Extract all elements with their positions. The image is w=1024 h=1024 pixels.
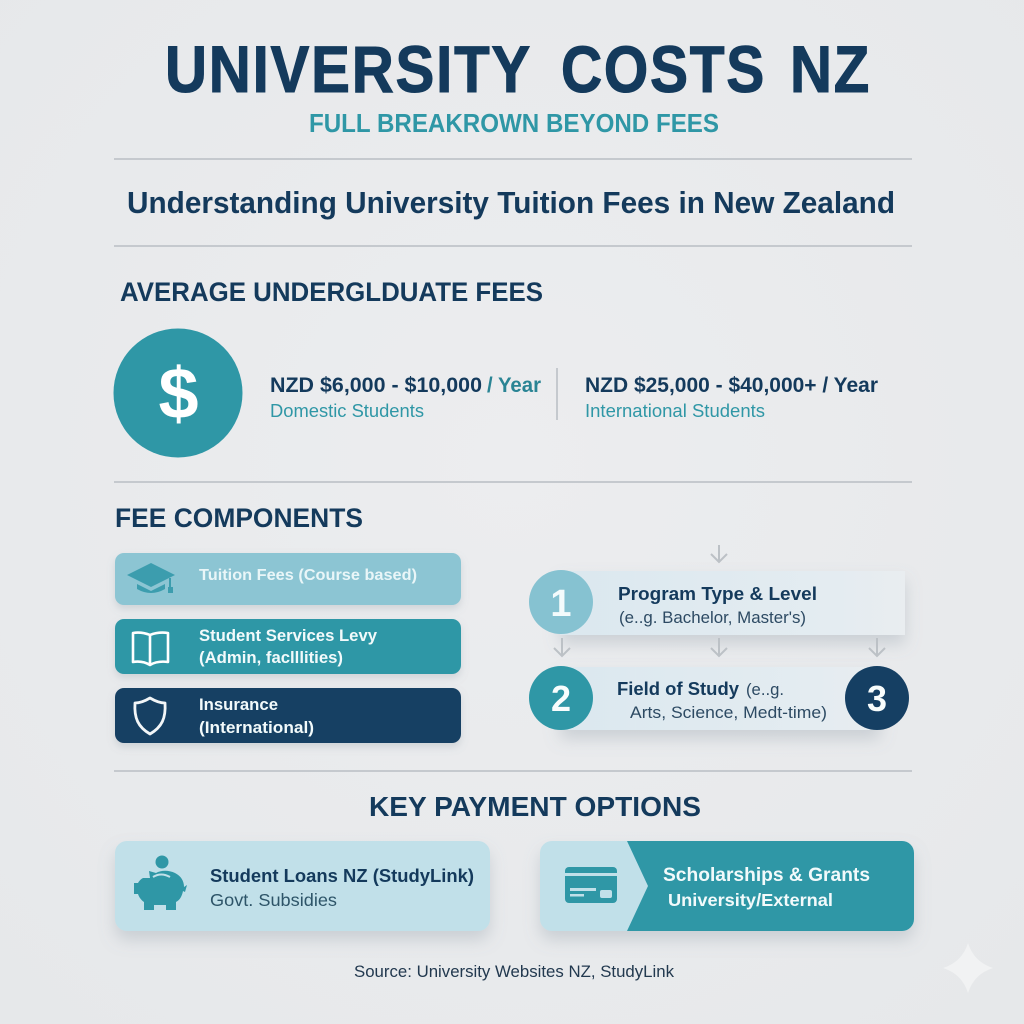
step 2 badge [529, 666, 593, 730]
panel: program type [560, 571, 905, 635]
card: student loans: Govt. Subsidies [210, 890, 337, 910]
panel: field of study [560, 667, 880, 730]
card: scholarships and grants: University/External [668, 890, 833, 910]
icon: sparkle watermark [943, 943, 993, 993]
panel: insurance: (International) [199, 719, 314, 737]
panel: insurance: Insurance [199, 696, 278, 714]
panel: tuition fees [115, 553, 461, 605]
heading: average undergraduate fees: AVERAGE UNDERGLDUATE FEES [120, 277, 543, 307]
subtitle: FULL BREAKROWN BEYOND FEES [309, 108, 719, 138]
domestic fee text: NZD $6,000 - $10,000 [270, 374, 482, 397]
icon: dollar coin [114, 328, 242, 458]
step 3 badge [845, 666, 909, 730]
title: UNIVERSITY [165, 32, 532, 106]
panel: field of study: Field of Study [617, 678, 740, 699]
domestic fee text: Domestic Students [270, 401, 424, 421]
arrow: top [711, 545, 727, 562]
heading: key payment options: KEY PAYMENT OPTIONS [369, 791, 701, 822]
panel: field of study: Arts, Science, Medt-time) [630, 704, 827, 722]
title [165, 32, 871, 106]
panel: tuition fees: Tuition Fees (Course based) [199, 567, 417, 584]
card: scholarships and grants: Scholarships & Grants [663, 864, 870, 886]
icon: open book [133, 633, 168, 665]
card: student loans [115, 841, 490, 931]
icon: shield [135, 698, 165, 734]
international fee text: International Students [585, 401, 765, 421]
card: student loans: Student Loans NZ (StudyLink) [210, 865, 474, 886]
icon: dollar coin: $ [158, 354, 199, 434]
arrows: middle row [554, 638, 885, 656]
panel: program type: (e..g. Bachelor, Master's) [619, 609, 806, 627]
panel: insurance [115, 688, 461, 743]
step 2 badge: 2 [551, 678, 571, 719]
panel: student services levy: (Admin, faclllities) [199, 649, 343, 667]
title: NZ [790, 32, 871, 106]
icon: credit card [565, 867, 617, 903]
panel: student services levy [115, 619, 461, 674]
step 1 badge [529, 570, 593, 634]
icon: graduation cap [127, 563, 175, 593]
step 1 badge: 1 [550, 583, 572, 625]
panel: program type: Program Type & Level [618, 583, 817, 604]
international fee text: NZD $25,000 - $40,000+ / Year [585, 374, 878, 397]
panel: field of study: (e..g. [746, 680, 784, 699]
title: COSTS [561, 32, 766, 106]
card: scholarships and grants [540, 841, 914, 931]
section heading: understanding fees: Understanding University Tuition Fees in New Zealand [127, 185, 895, 220]
source note: Source: University Websites NZ, StudyLink [354, 962, 674, 981]
step 3 badge: 3 [867, 678, 887, 719]
icon: piggy bank [134, 856, 187, 910]
heading: fee components: FEE COMPONENTS [115, 503, 363, 533]
international fee text [585, 374, 878, 421]
domestic fee text [270, 374, 541, 421]
panel: student services levy: Student Services Levy [199, 627, 378, 645]
domestic fee text: / Year [487, 374, 541, 397]
